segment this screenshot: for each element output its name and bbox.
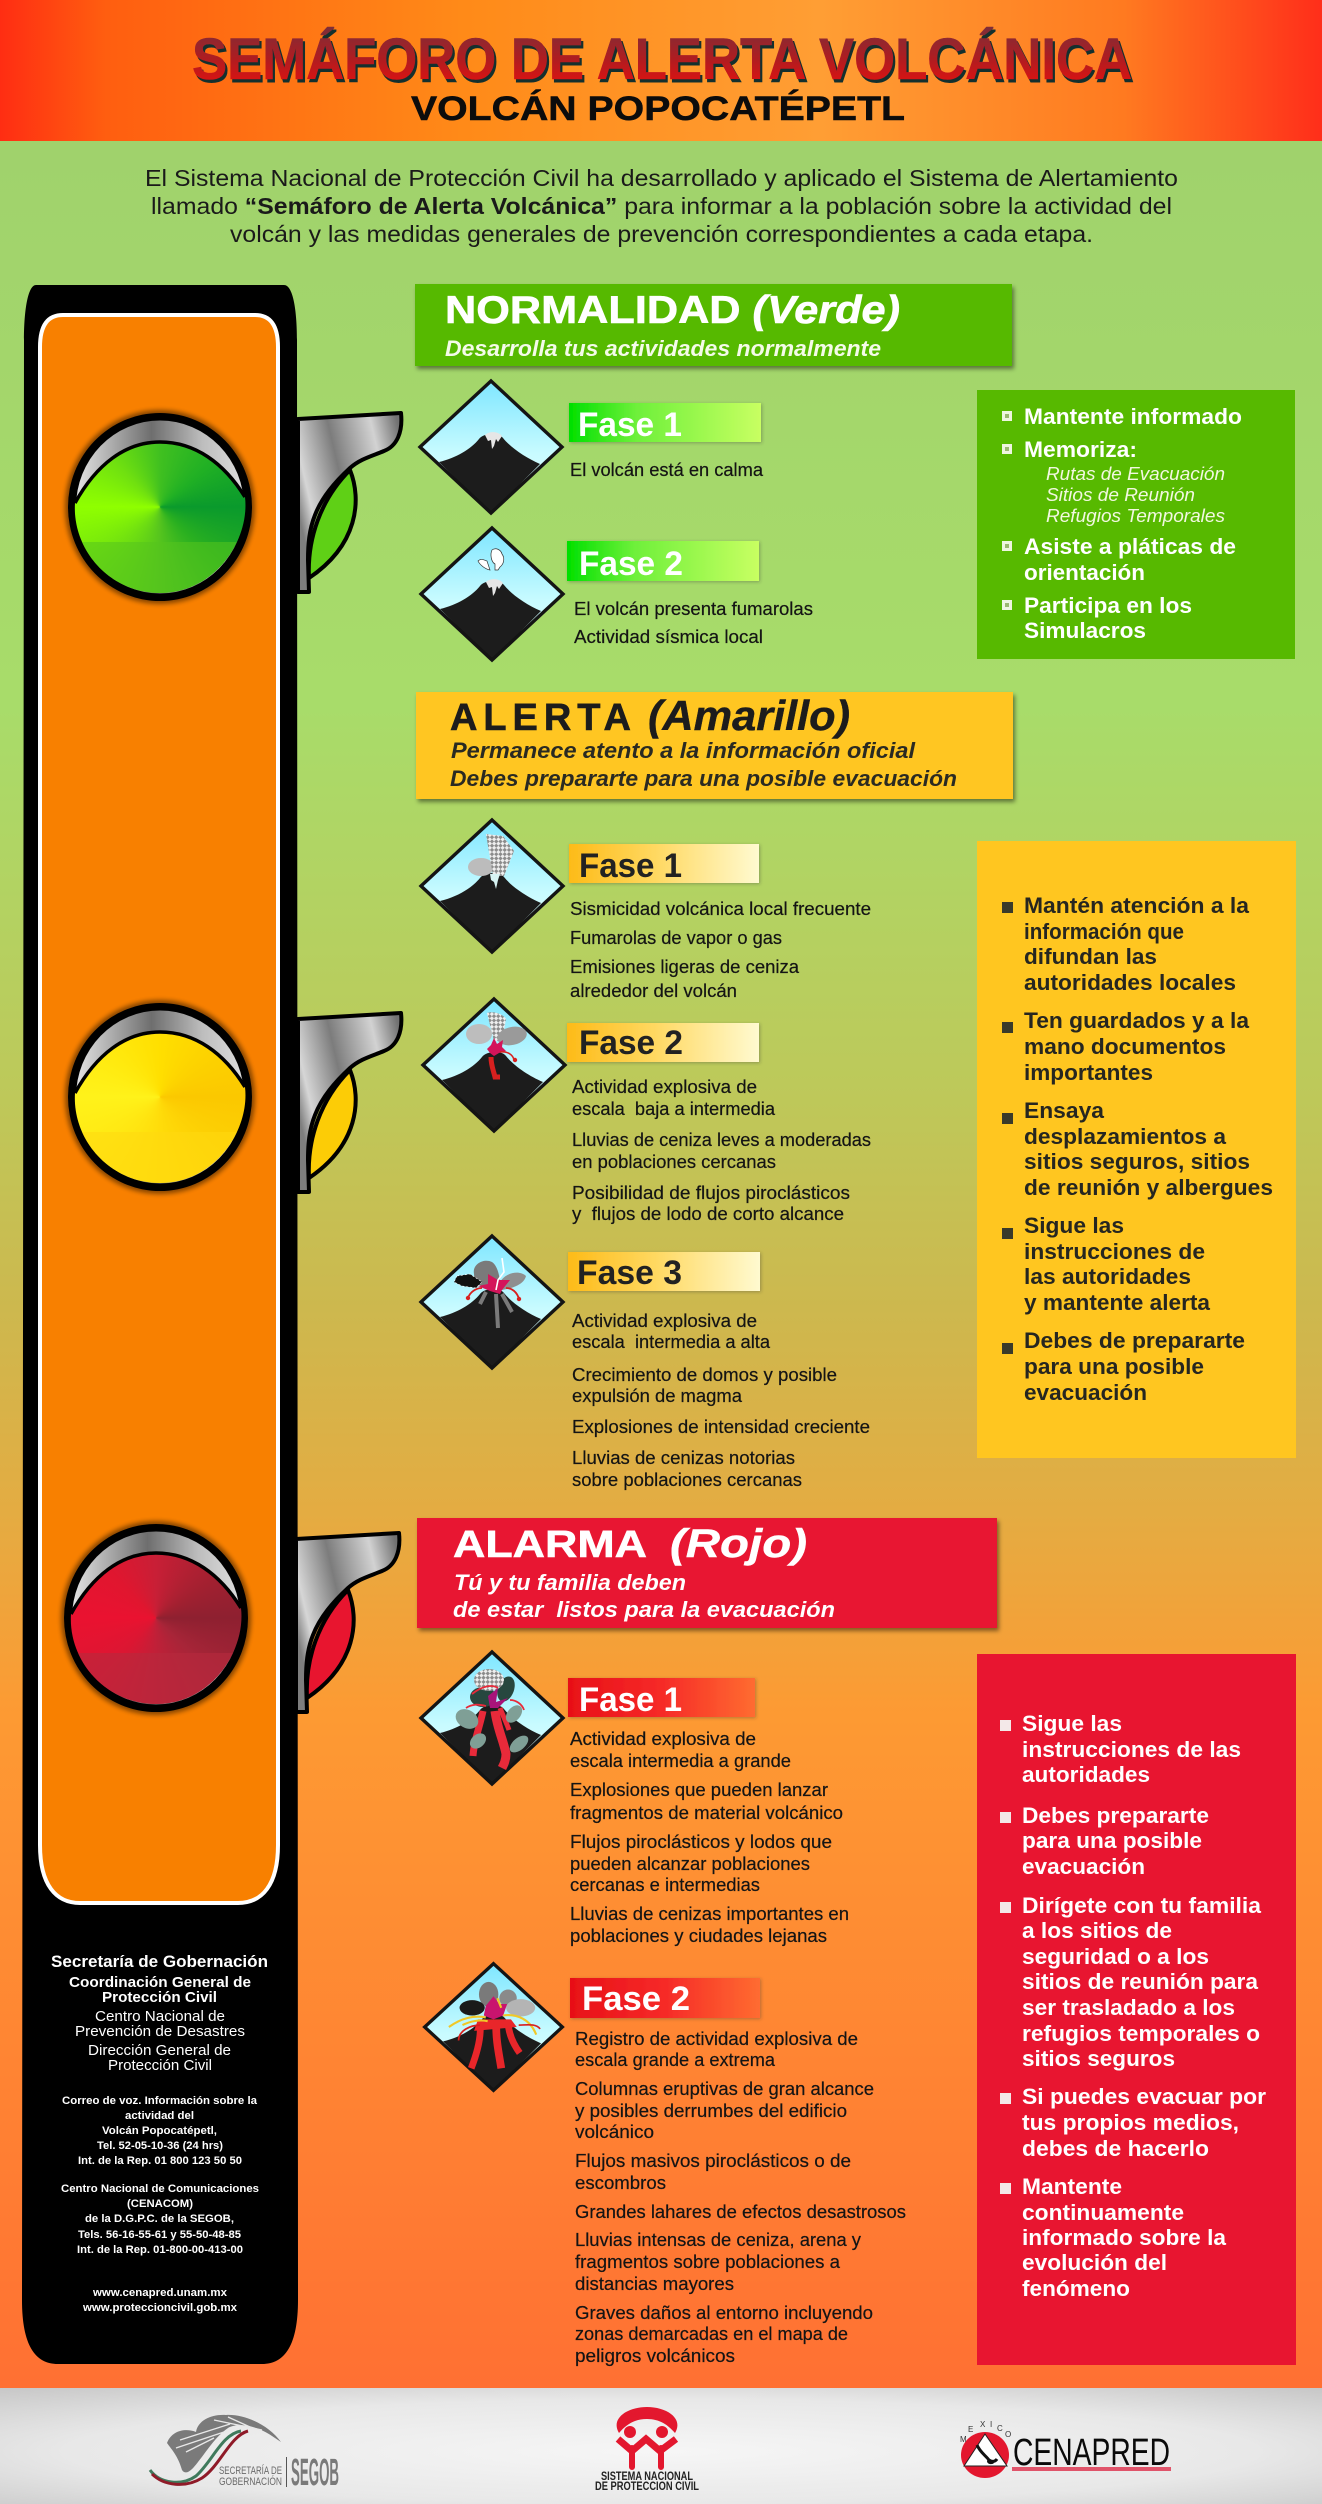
fase 2 rojo	[425, 1964, 906, 2366]
description	[570, 899, 871, 1001]
description: zonas demarcadas en el mapa de	[575, 2324, 848, 2344]
description: poblaciones y ciudades lejanas	[570, 1926, 827, 1946]
description: escala grande a extrema	[575, 2050, 776, 2070]
description: Fumarolas de vapor o gas	[570, 928, 782, 948]
logo: CENAPRED: M	[960, 2435, 967, 2444]
logo: SEGOB	[150, 2415, 339, 2494]
banner: alarma: (Rojo)	[670, 1522, 807, 1566]
label	[569, 403, 761, 444]
description: Posibilidad de flujos piroclásticos	[572, 1183, 850, 1203]
panel: recomendaciones verde: Mantente informado	[1024, 404, 1242, 429]
logo: CENAPRED: E	[968, 2425, 973, 2434]
footer band	[0, 2388, 1322, 2504]
panel: recomendaciones amarillo: difundan las	[1024, 944, 1157, 969]
panel: recomendaciones amarillo: evacuación	[1024, 1380, 1147, 1405]
institutional contact text: Centro Nacional de Comunicaciones	[61, 2183, 259, 2195]
panel: recomendaciones rojo: autoridades	[1022, 1762, 1150, 1787]
description: distancias mayores	[575, 2274, 734, 2294]
banner: alerta: (Amarillo)	[648, 692, 850, 739]
label	[570, 1978, 760, 2018]
panel: recomendaciones rojo	[977, 1654, 1296, 2365]
panel: recomendaciones amarillo: Ten guardados y a la	[1024, 1008, 1249, 1033]
header band	[0, 0, 1322, 141]
logo: SEGOB: GOBERNACIÓN	[219, 2475, 282, 2488]
description	[574, 599, 813, 647]
panel: recomendaciones rojo: seguridad o a los	[1022, 1944, 1209, 1969]
panel: recomendaciones amarillo: instrucciones de	[1024, 1239, 1205, 1264]
panel: recomendaciones rojo: ser trasladado a los	[1022, 1995, 1235, 2020]
banner: alerta	[416, 692, 1013, 799]
panel: recomendaciones amarillo: Mantén atención a la	[1024, 893, 1249, 918]
traffic light body	[22, 285, 298, 2364]
description: Actividad explosiva de	[572, 1077, 757, 1097]
panel: recomendaciones rojo: Sigue las	[1022, 1711, 1122, 1736]
description: sobre poblaciones cercanas	[572, 1470, 802, 1490]
institutional contact text: Volcán Popocatépetl,	[102, 2125, 217, 2137]
panel: recomendaciones amarillo: sitios seguros, sitios	[1024, 1149, 1250, 1174]
logo: Sistema Nacional de Protección Civil: DE PROTECCION CIVIL	[595, 2481, 699, 2493]
panel: recomendaciones rojo: evacuación	[1022, 1854, 1145, 1879]
institutional contact text	[51, 1953, 268, 2314]
banner: alarma	[417, 1518, 997, 1628]
institutional contact text: Tel. 52-05-10-36 (24 hrs)	[97, 2140, 223, 2152]
description	[575, 2029, 906, 2366]
panel: recomendaciones rojo: a los sitios de	[1022, 1918, 1172, 1943]
banner: alerta: ALERTA	[450, 697, 631, 739]
description: Lluvias de cenizas notorias	[572, 1448, 795, 1468]
panel: recomendaciones rojo: fenómeno	[1022, 2276, 1130, 2301]
description: escala baja a intermedia	[572, 1099, 776, 1119]
logo: CENAPRED	[960, 2420, 1171, 2478]
panel: recomendaciones amarillo: y mantente alerta	[1024, 1290, 1210, 1315]
banner: alarma: Tú y tu familia deben	[454, 1570, 686, 1595]
label: Fase 1	[579, 847, 682, 885]
panel: recomendaciones rojo: Mantente	[1022, 2174, 1122, 2199]
panel: recomendaciones rojo: continuamente	[1022, 2200, 1184, 2225]
description: Sismicidad volcánica local frecuente	[570, 899, 871, 919]
icon: volcano intermediate explosive	[421, 1236, 563, 1368]
panel: recomendaciones amarillo: autoridades locales	[1024, 970, 1236, 995]
panel: recomendaciones verde	[977, 390, 1295, 659]
panel: recomendaciones rojo: instrucciones de las	[1022, 1737, 1241, 1762]
description: Emisiones ligeras de ceniza	[570, 957, 800, 977]
intro text: volcán y las medidas generales de prevención correspondientes a cada etapa.	[230, 221, 1093, 247]
panel: recomendaciones rojo: Si puedes evacuar por	[1022, 2084, 1266, 2109]
description: Lluvias de ceniza leves a moderadas	[572, 1130, 871, 1150]
description: pueden alcanzar poblaciones	[570, 1854, 810, 1874]
description: y flujos de lodo de corto alcance	[572, 1204, 844, 1224]
description: expulsión de magma	[572, 1386, 743, 1406]
banner: alerta: Debes prepararte para una posible evacuación	[450, 766, 957, 791]
description: Explosiones que pueden lanzar	[570, 1780, 828, 1800]
side hood: yellow lamp	[298, 1013, 401, 1192]
traffic light orange panel	[40, 315, 278, 1903]
logo: Sistema Nacional de Protección Civil	[595, 2407, 699, 2493]
description: escombros	[575, 2173, 666, 2193]
panel: recomendaciones verde: Simulacros	[1024, 618, 1146, 643]
panel: recomendaciones amarillo: Ensaya	[1024, 1098, 1104, 1123]
description: fragmentos de material volcánico	[570, 1803, 843, 1823]
institutional contact text: Correo de voz. Información sobre la	[62, 2095, 258, 2107]
institutional contact text: Dirección General de	[88, 2042, 231, 2059]
panel: recomendaciones amarillo: Debes de prepararte	[1024, 1328, 1245, 1353]
institutional contact text: Int. de la Rep. 01-800-00-413-00	[77, 2244, 243, 2256]
title: SEMÁFORO DE ALERTA VOLCÁNICA	[194, 30, 1134, 95]
description: Actividad explosiva de	[570, 1729, 756, 1749]
panel: recomendaciones rojo: Debes prepararte	[1022, 1803, 1209, 1828]
institutional contact text: Prevención de Desastres	[75, 2023, 245, 2040]
label	[567, 1023, 759, 1062]
label: Fase 3	[577, 1254, 682, 1292]
description: y posibles derrumbes del edificio	[575, 2101, 847, 2121]
institutional contact text: www.cenapred.unam.mx	[92, 2287, 228, 2299]
side hood: red lamp	[296, 1533, 399, 1712]
label: Fase 1	[578, 406, 682, 444]
institutional contact text: Secretaría de Gobernación	[51, 1953, 268, 1971]
panel: recomendaciones amarillo: información que	[1024, 919, 1184, 944]
panel: recomendaciones rojo: para una posible	[1022, 1828, 1202, 1853]
fase 3 amarillo	[421, 1236, 870, 1490]
institutional contact text: (CENACOM)	[127, 2198, 193, 2210]
description: Explosiones de intensidad creciente	[572, 1417, 870, 1437]
institutional contact text: Protección Civil	[102, 1989, 217, 2006]
panel: recomendaciones verde: Rutas de Evacuación	[1046, 464, 1225, 484]
intro text: El Sistema Nacional de Protección Civil ha desarrollado y aplicado el Sistema de Alertamiento	[145, 165, 1178, 191]
description: Columnas eruptivas de gran alcance	[575, 2079, 874, 2099]
description: El volcán presenta fumarolas	[574, 599, 813, 619]
label: Fase 2	[579, 1024, 683, 1062]
description: El volcán está en calma	[570, 460, 764, 480]
description: Lluvias de cenizas importantes en	[570, 1904, 849, 1924]
panel: recomendaciones rojo: Dirígete con tu familia	[1022, 1893, 1261, 1918]
lamp: yellow	[60, 1000, 260, 1194]
icon: volcano large explosive	[421, 1652, 563, 1784]
banner: alarma: ALARMA	[453, 1524, 647, 1566]
label	[568, 1678, 755, 1719]
banner: alerta: Permanece atento a la información oficial	[451, 738, 916, 763]
label: Fase 2	[582, 1980, 690, 2018]
panel: recomendaciones amarillo: de reunión y albergues	[1024, 1175, 1273, 1200]
lamp: green	[60, 410, 260, 604]
description: escala intermedia a grande	[570, 1751, 791, 1771]
institutional contact text: de la D.G.P.C. de la SEGOB,	[85, 2213, 234, 2225]
description: en poblaciones cercanas	[572, 1152, 776, 1172]
icon: volcano emitting ash	[421, 820, 563, 952]
institutional contact text: Centro Nacional de	[95, 2008, 225, 2025]
fase 2 verde	[421, 528, 813, 660]
panel: recomendaciones amarillo: las autoridades	[1024, 1264, 1191, 1289]
institutional contact text: Int. de la Rep. 01 800 123 50 50	[78, 2155, 242, 2167]
description	[570, 1729, 849, 1946]
panel: recomendaciones verde: Memoriza:	[1024, 437, 1137, 462]
institutional contact text: www.proteccioncivil.gob.mx	[82, 2302, 238, 2314]
fase 2 amarillo	[423, 999, 871, 1224]
institutional contact text: Protección Civil	[108, 2057, 212, 2074]
panel: recomendaciones amarillo: mano documentos	[1024, 1034, 1226, 1059]
side hood: green lamp	[298, 413, 401, 592]
institutional contact text: Tels. 56-16-55-61 y 55-50-48-85	[78, 2229, 241, 2241]
panel: recomendaciones amarillo: importantes	[1024, 1060, 1153, 1085]
fase 1 amarillo	[421, 820, 871, 1001]
icon: volcano low explosive	[423, 999, 565, 1131]
panel: recomendaciones rojo: sitios de reunión para	[1022, 1969, 1258, 1994]
description	[572, 1311, 870, 1490]
panel: recomendaciones rojo: sitios seguros	[1022, 2046, 1175, 2071]
description: fragmentos sobre poblaciones a	[575, 2252, 841, 2272]
logo: Sistema Nacional de Protección Civil: SISTEMA NACIONAL	[601, 2471, 693, 2483]
logo: CENAPRED: O	[1005, 2430, 1011, 2439]
panel: recomendaciones amarillo	[977, 841, 1296, 1458]
logo: CENAPRED: CENAPRED	[1013, 2432, 1170, 2474]
description: volcánico	[575, 2122, 654, 2142]
panel: recomendaciones verde: orientación	[1024, 560, 1145, 585]
subtitle: VOLCÁN POPOCATÉPETL	[411, 90, 905, 128]
description: alrededor del volcán	[570, 981, 737, 1001]
description: Flujos piroclásticos y lodos que	[570, 1832, 832, 1852]
panel: recomendaciones verde: Asiste a pláticas de	[1024, 534, 1236, 559]
banner: normalidad: Desarrolla tus actividades normalmente	[445, 336, 881, 361]
description: escala intermedia a alta	[572, 1332, 771, 1352]
logo: CENAPRED: I	[990, 2420, 992, 2429]
description: Crecimiento de domos y posible	[572, 1365, 837, 1385]
panel: recomendaciones amarillo: desplazamientos a	[1024, 1124, 1226, 1149]
panel: recomendaciones verde: Sitios de Reunión	[1046, 485, 1195, 505]
panel: recomendaciones amarillo: para una posible	[1024, 1354, 1204, 1379]
banner: normalidad	[415, 284, 1012, 366]
description: cercanas e intermedias	[570, 1875, 760, 1895]
panel: recomendaciones verde: Refugios Temporales	[1046, 506, 1225, 526]
panel: recomendaciones rojo: informado sobre la	[1022, 2225, 1226, 2250]
intro text	[145, 165, 1178, 247]
description: Registro de actividad explosiva de	[575, 2029, 858, 2049]
fase 1 rojo	[421, 1652, 849, 1946]
label	[568, 1252, 760, 1292]
label: Fase 1	[579, 1681, 682, 1719]
text: SEGOB	[291, 2452, 339, 2494]
description: Flujos masivos piroclásticos o de	[575, 2151, 851, 2171]
description: Lluvias intensas de ceniza, arena y	[575, 2230, 861, 2250]
logo: CENAPRED: C	[997, 2424, 1003, 2433]
intro text: llamado “Semáforo de Alerta Volcánica” para informar a la población sobre la actividad del	[151, 193, 1172, 219]
banner: alarma: de estar listos para la evacuación	[453, 1597, 835, 1622]
label	[567, 541, 759, 583]
panel: recomendaciones rojo: refugios temporales o	[1022, 2021, 1260, 2046]
description: Actividad sísmica local	[574, 627, 763, 647]
logo: SEGOB: SECRETARÍA DE	[219, 2464, 282, 2477]
banner: normalidad: NORMALIDAD (Verde)	[445, 289, 900, 332]
icon: volcano with fumaroles	[421, 528, 563, 660]
title: SEMÁFORO DE ALERTA VOLCÁNICA	[192, 27, 1132, 92]
description	[572, 1077, 871, 1224]
fase 1 verde	[420, 381, 764, 513]
panel: recomendaciones rojo: debes de hacerlo	[1022, 2136, 1209, 2161]
description: peligros volcánicos	[575, 2346, 735, 2366]
lamp: red	[56, 1521, 256, 1715]
panel: recomendaciones rojo: tus propios medios,	[1022, 2110, 1239, 2135]
institutional contact text: actividad del	[125, 2110, 194, 2122]
panel: recomendaciones amarillo: Sigue las	[1024, 1213, 1124, 1238]
panel: recomendaciones verde: Participa en los	[1024, 593, 1192, 618]
icon: volcano extreme explosive	[425, 1964, 562, 2090]
label: Fase 2	[579, 545, 683, 583]
icon: volcano calm	[420, 381, 562, 513]
description: Graves daños al entorno incluyendo	[575, 2303, 873, 2323]
logo: CENAPRED: X	[980, 2420, 986, 2429]
description: Actividad explosiva de	[572, 1311, 757, 1331]
institutional contact text: Coordinación General de	[69, 1974, 251, 1991]
label	[569, 844, 759, 885]
panel: recomendaciones rojo: evolución del	[1022, 2250, 1167, 2275]
description: Grandes lahares de efectos desastrosos	[575, 2202, 906, 2222]
